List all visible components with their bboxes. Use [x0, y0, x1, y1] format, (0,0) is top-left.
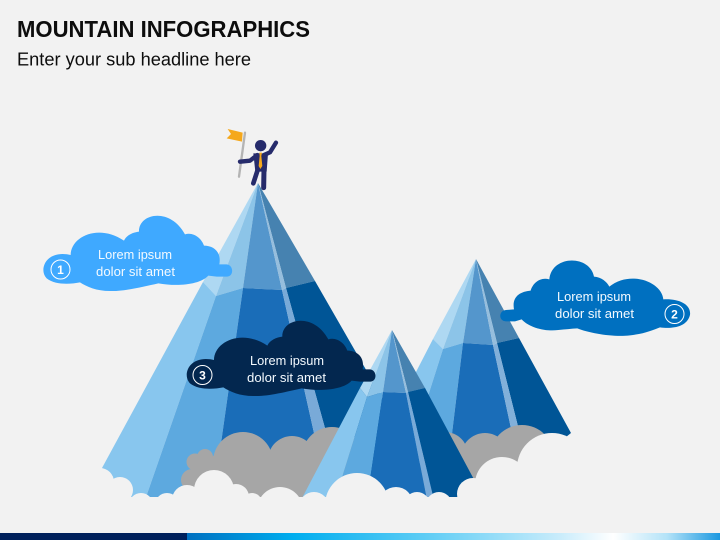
- medium mountain: [350, 259, 571, 500]
- flag pole: [239, 133, 245, 177]
- number badge 2: 2: [671, 308, 678, 322]
- person with flag: [227, 129, 276, 188]
- tie: [259, 153, 262, 169]
- grey cloud right: [422, 425, 554, 498]
- footer bar: [0, 533, 720, 540]
- number badge 1: [51, 260, 70, 279]
- flag: [227, 129, 243, 142]
- large mountain: [102, 183, 438, 500]
- callout 3 text: [247, 354, 327, 385]
- callout 3 text: dolor sit amet: [247, 371, 327, 385]
- foreground white clouds: [86, 433, 587, 537]
- number badge 2: [665, 304, 684, 324]
- subtitle: Enter your sub headline here: [17, 50, 251, 70]
- callout 1 text: Lorem ipsum: [98, 248, 172, 262]
- callout 1: [43, 216, 232, 291]
- small mountain: [301, 330, 485, 500]
- number badge 3: [193, 366, 212, 384]
- callout 2 text: dolor sit amet: [555, 307, 635, 321]
- callout 1 text: dolor sit amet: [96, 265, 176, 279]
- figure: [240, 140, 276, 188]
- number badge 1: 1: [57, 263, 64, 277]
- grey cloud left: [181, 427, 362, 498]
- callout 2 text: Lorem ipsum: [557, 290, 631, 304]
- callout 3 text: Lorem ipsum: [250, 354, 324, 368]
- title: MOUNTAIN INFOGRAPHICS: [17, 16, 310, 42]
- callout 3: [187, 321, 375, 396]
- callout 2 text: [555, 290, 635, 321]
- callout 1 text: [96, 248, 176, 279]
- callout 2: [500, 260, 690, 336]
- number badge 3: 3: [199, 368, 206, 382]
